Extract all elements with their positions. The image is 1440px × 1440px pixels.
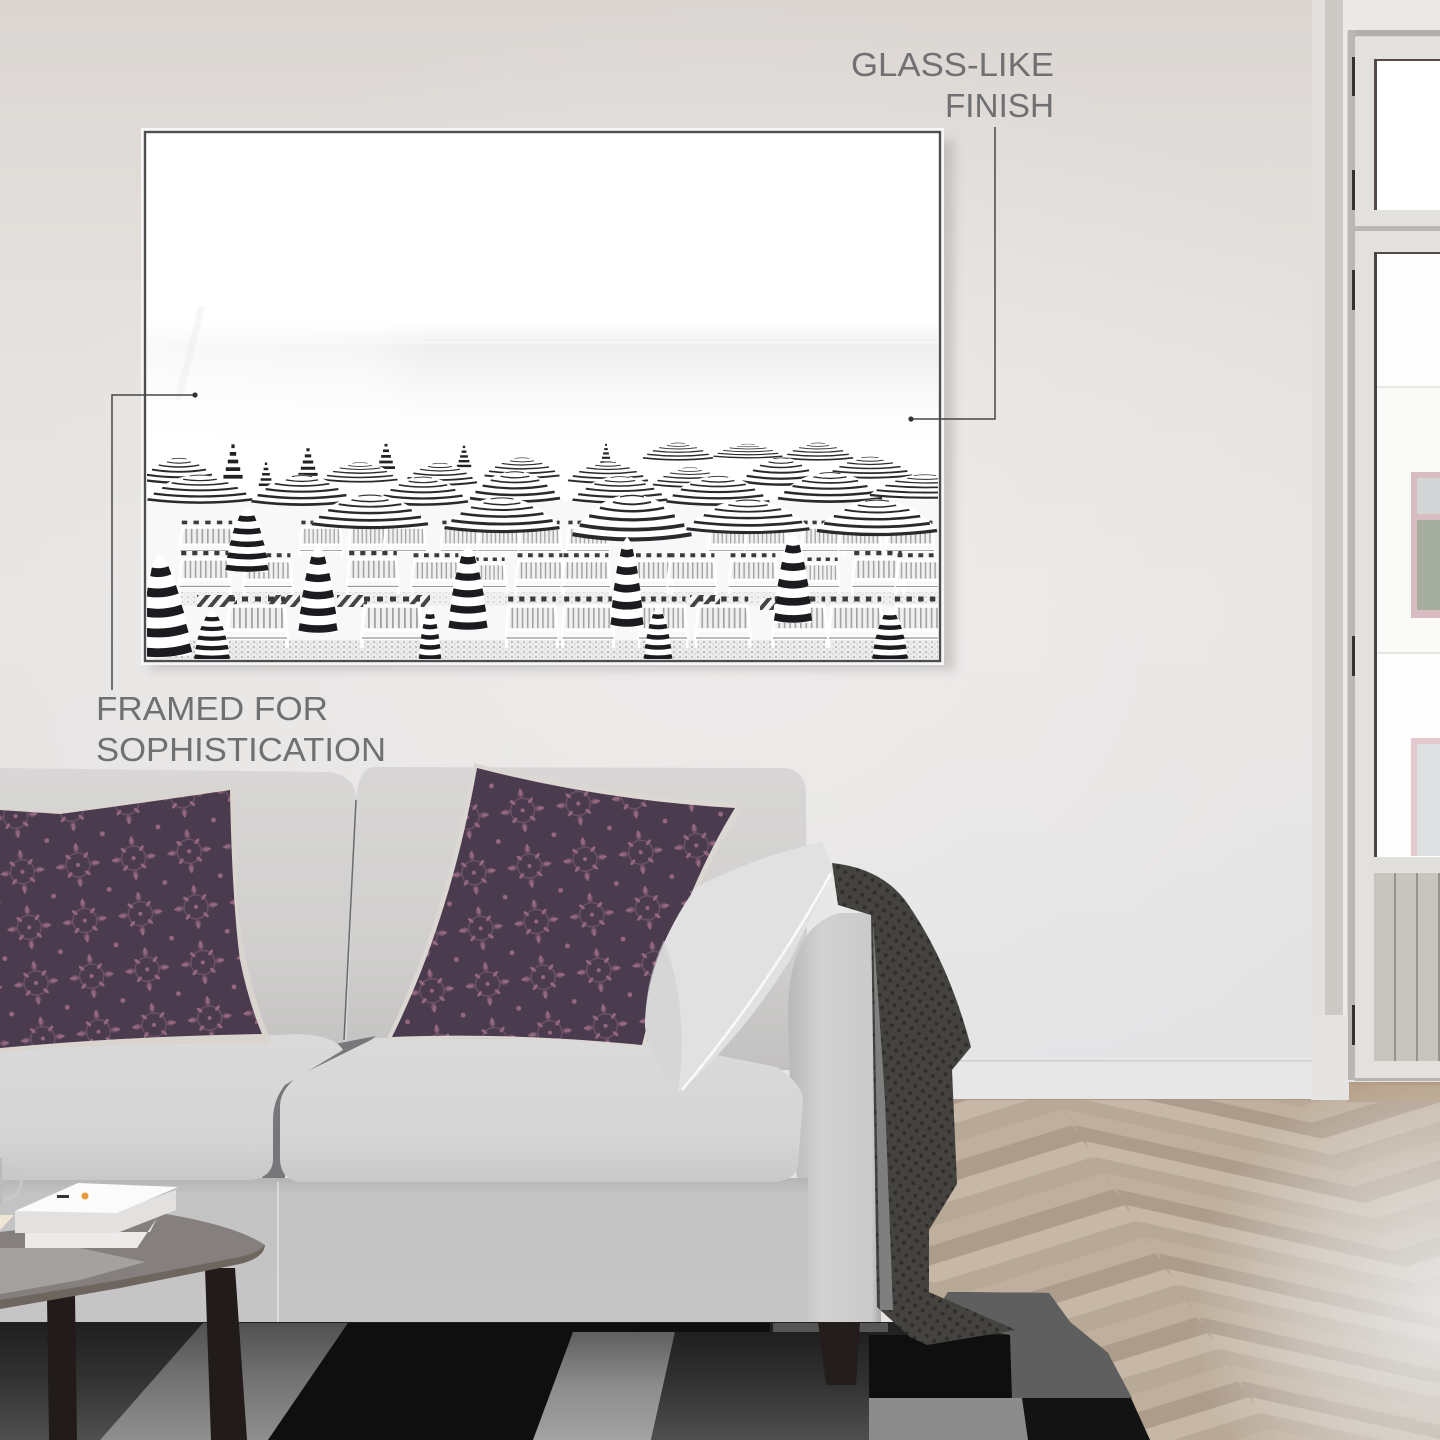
framed art shadow bbox=[150, 140, 954, 670]
row of deck chairs middle bbox=[180, 553, 944, 595]
window pane top bbox=[1374, 59, 1440, 210]
books bbox=[15, 1183, 178, 1248]
row of deck chairs back bbox=[180, 520, 934, 551]
glass mug and plate bbox=[0, 1158, 22, 1230]
callout label: GLASS-LIKE bbox=[851, 46, 1054, 83]
callout label: FRAMED FOR bbox=[96, 690, 328, 727]
middle umbrellas bbox=[148, 471, 980, 506]
beach ground bbox=[148, 592, 938, 659]
window door bbox=[1311, 0, 1440, 1100]
table legs bbox=[47, 1296, 77, 1440]
back umbrellas bbox=[142, 442, 912, 488]
baseboard bbox=[930, 1058, 1315, 1101]
sofa seat right cushion bbox=[280, 1038, 803, 1182]
door lower wood panel bbox=[1370, 858, 1440, 1061]
sofa leg bbox=[818, 1322, 860, 1385]
callout: framed for sophistication: SOPHISTICATION bbox=[96, 731, 386, 768]
sofa back right cushion bbox=[345, 767, 808, 1070]
framed artwork bbox=[135, 128, 980, 665]
marble table top bbox=[0, 1213, 265, 1308]
striped towels bbox=[197, 595, 800, 610]
front umbrellas bbox=[312, 494, 937, 541]
hinges bbox=[1352, 57, 1355, 1045]
window pane with view bbox=[1374, 252, 1440, 857]
callout: glass-like finish bbox=[851, 46, 1054, 422]
sofa arm bbox=[788, 913, 881, 1322]
purple pillow left bbox=[0, 787, 270, 1052]
sofa back left cushion bbox=[0, 768, 356, 1070]
throw blanket bbox=[832, 863, 1016, 1345]
coffee table bbox=[0, 1213, 265, 1440]
white pillow bbox=[645, 842, 833, 1093]
sea and horizon bbox=[175, 322, 938, 400]
door trim bbox=[1311, 0, 1349, 1100]
row of deck chairs front bbox=[227, 599, 947, 648]
sofa bbox=[0, 767, 881, 1385]
sofa seat left cushion bbox=[0, 1034, 343, 1180]
wall background bbox=[0, 0, 1440, 1100]
herringbone wood floor bbox=[900, 1082, 1440, 1440]
cone umbrellas bbox=[223, 443, 612, 487]
closed umbrellas bbox=[135, 507, 908, 660]
sofa base bbox=[0, 1178, 808, 1322]
purple pillow right bbox=[386, 763, 742, 1047]
rug bbox=[0, 1292, 1150, 1440]
callout: framed for sophistication bbox=[96, 392, 386, 768]
sofa seat gap shadow bbox=[262, 1036, 376, 1182]
callout: glass-like finish: FINISH bbox=[945, 87, 1054, 124]
